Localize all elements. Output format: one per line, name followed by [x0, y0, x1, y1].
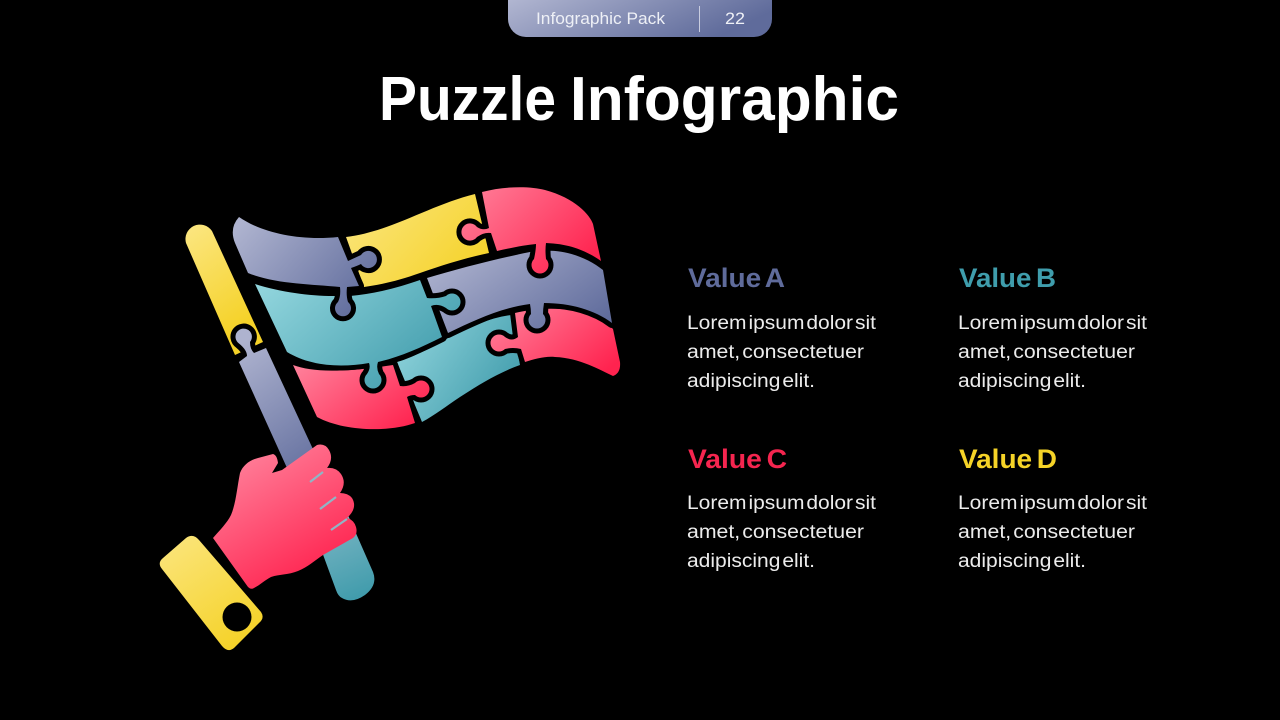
header pill: 22 — [725, 10, 745, 28]
flag pole: yellow top — [185, 225, 263, 355]
icon: hand gripping pole — [213, 445, 357, 589]
title: Infographic — [570, 65, 899, 134]
text block: Value D: Value D — [959, 444, 1057, 474]
header pill: Infographic Pack — [536, 10, 666, 28]
text block: Value C: adipiscing elit. — [687, 551, 815, 572]
puzzle piece: yellow top — [346, 194, 489, 287]
icon: shirt cuff with button — [160, 536, 263, 650]
text block: Value D: amet, consectetuer — [958, 522, 1136, 543]
text block: Value C — [687, 444, 877, 572]
puzzle piece: red lower right — [490, 309, 620, 376]
text block: Value A: amet, consectetuer — [687, 342, 865, 363]
text block: Value A — [687, 263, 877, 392]
title — [379, 65, 899, 134]
text block: Value A: adipiscing elit. — [687, 371, 815, 392]
text block: Value C: Lorem ipsum dolor sit — [687, 493, 877, 514]
flag pole: teal bottom — [296, 465, 374, 600]
puzzle piece: teal lower — [397, 315, 520, 422]
text block: Value B — [958, 263, 1148, 392]
text block: Value D: Lorem ipsum dolor sit — [958, 493, 1148, 514]
text block: Value B: Value B — [959, 263, 1056, 293]
text block: Value B: Lorem ipsum dolor sit — [958, 313, 1148, 334]
flag illustration — [160, 187, 620, 650]
header pill — [508, 0, 772, 37]
text block: Value D: adipiscing elit. — [958, 551, 1086, 572]
puzzle piece: gray middle — [427, 251, 612, 333]
text block: Value C: Value C — [688, 444, 787, 474]
text block: Value B: adipiscing elit. — [958, 371, 1086, 392]
text block: Value B: amet, consectetuer — [958, 342, 1136, 363]
puzzle piece: red top — [461, 187, 601, 274]
puzzle piece: teal middle — [255, 280, 461, 389]
text block: Value A: Value A — [688, 263, 785, 293]
text block: Value D — [958, 444, 1148, 572]
text block: Value C: amet, consectetuer — [687, 522, 865, 543]
title: Puzzle — [379, 65, 556, 134]
flag pole: gray middle — [235, 329, 325, 490]
text block: Value A: Lorem ipsum dolor sit — [687, 313, 877, 334]
puzzle piece: gray top — [233, 217, 377, 316]
puzzle piece: red lower left — [293, 365, 430, 429]
